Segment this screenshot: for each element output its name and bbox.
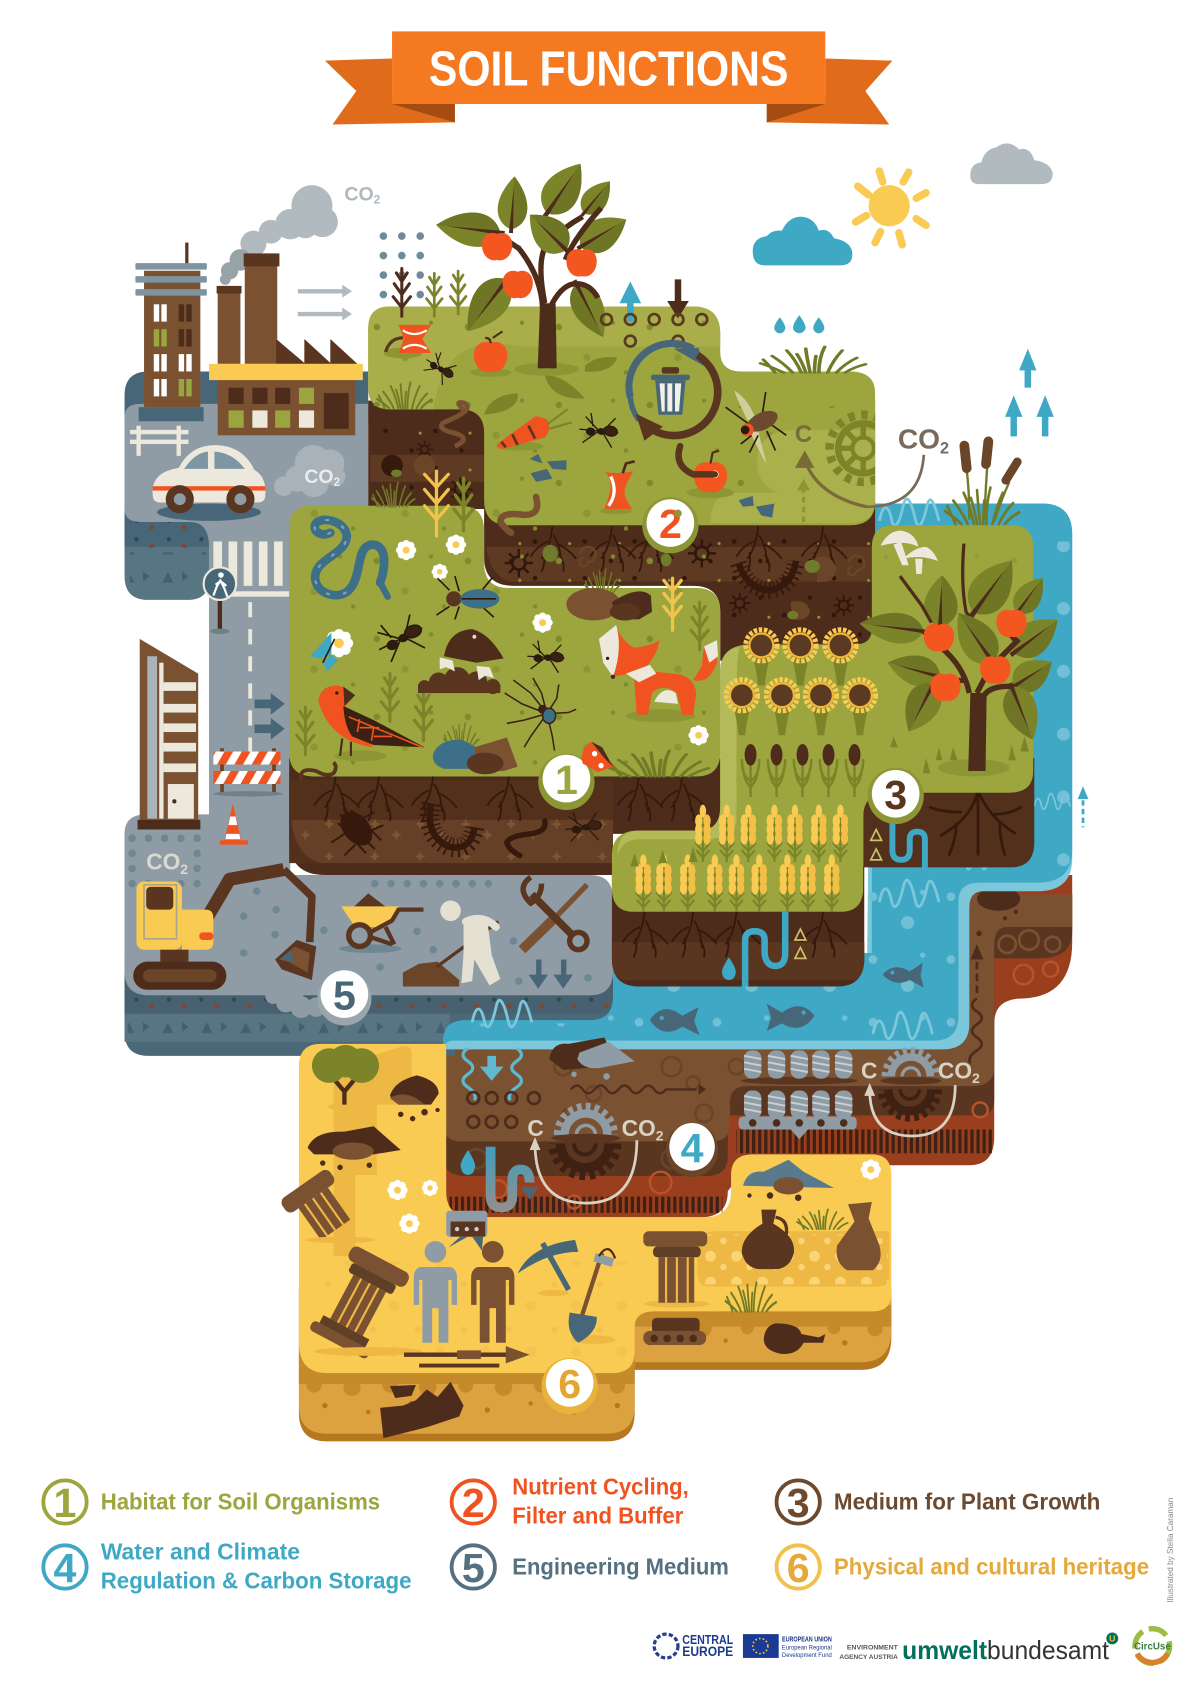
ant bbox=[577, 411, 621, 449]
brown up arrow and wavy line bbox=[970, 944, 983, 1063]
panel 5: engineering medium grey ground bbox=[125, 371, 613, 1056]
grass tuft bbox=[607, 751, 709, 776]
buried amphora bbox=[764, 1323, 825, 1354]
red butterfly bbox=[582, 742, 613, 772]
legend item 3 bbox=[777, 1480, 1100, 1526]
C to CO2 cycle left: 2 bbox=[656, 1127, 664, 1143]
apple core bbox=[600, 461, 635, 514]
grass left bbox=[377, 382, 432, 408]
legend item 1 bbox=[43, 1480, 380, 1526]
illustrator credit: Illustrated by Stella Caraman bbox=[1166, 1498, 1175, 1603]
legend item 4: 4 bbox=[54, 1545, 77, 1591]
dust cloud bbox=[265, 988, 336, 1018]
panel 4: carbon storage ground with red subsoil bbox=[443, 875, 1072, 1217]
stones bbox=[433, 723, 518, 774]
ground dots bbox=[128, 834, 592, 985]
legend item 2: 2 bbox=[462, 1480, 485, 1526]
cattails bbox=[959, 436, 1023, 522]
tree roots bbox=[929, 791, 1021, 855]
CO2 label on ground: 2 bbox=[180, 861, 188, 877]
mole bbox=[418, 629, 504, 694]
gas exchange arrows and pores bbox=[601, 279, 707, 347]
broken vase bbox=[837, 1202, 881, 1270]
lighter left ledge bbox=[617, 646, 740, 855]
wavy migration arrow bbox=[571, 1084, 706, 1095]
evaporation arrows bbox=[1005, 349, 1054, 436]
tower block bbox=[135, 243, 207, 421]
fruit tree top bbox=[434, 154, 635, 376]
rain drops bbox=[774, 315, 824, 333]
legend bbox=[43, 1473, 1149, 1594]
excavator bbox=[133, 870, 316, 990]
CircUse logo: CircUse bbox=[1134, 1641, 1171, 1652]
legend item 1: Habitat for Soil Organisms bbox=[101, 1489, 380, 1515]
light patches near gear bbox=[710, 430, 875, 523]
legend item 5: 5 bbox=[462, 1545, 485, 1591]
soil creatures bbox=[314, 775, 706, 855]
leaning broken column bbox=[279, 1167, 359, 1247]
green sprigs bbox=[297, 602, 708, 755]
badge 3 bbox=[868, 768, 924, 824]
EU fund text: Development Fund bbox=[782, 1653, 832, 1659]
CO2 label: CO bbox=[344, 183, 374, 205]
waves bbox=[472, 499, 1070, 1039]
particle dots bbox=[380, 232, 424, 298]
infiltration waves bbox=[463, 1048, 521, 1100]
daisies bbox=[396, 535, 709, 745]
soil pebbles bbox=[381, 455, 836, 620]
CO2 emission arc with cattails bbox=[866, 423, 1023, 524]
recycling bin cycle bbox=[629, 343, 718, 441]
panel 3 soil layers bbox=[612, 758, 1034, 987]
blue drainage pipes and triangles bbox=[722, 818, 925, 987]
badge 6: 6 bbox=[558, 1361, 581, 1407]
C to CO2 cycle left: CO bbox=[622, 1115, 656, 1141]
badge 2 bbox=[642, 497, 699, 553]
legend item 6: 6 bbox=[787, 1545, 810, 1591]
soil critters in nutrient layer bbox=[416, 441, 854, 616]
environment agency text: AGENCY AUSTRIA bbox=[839, 1654, 898, 1661]
pore circles bbox=[467, 1092, 540, 1128]
amphora jug bbox=[742, 1210, 794, 1269]
panel 2: nutrient cycling green surface bbox=[368, 154, 897, 553]
legend item 5 bbox=[452, 1545, 729, 1591]
CO2 label: 2 bbox=[374, 193, 381, 207]
panel 2 soil: dark brown under nutrient area bbox=[368, 401, 875, 661]
down arrow bbox=[480, 1056, 504, 1081]
road centre dashes bbox=[248, 602, 252, 758]
fox bbox=[599, 625, 718, 722]
fish bbox=[650, 963, 924, 1035]
smoke bbox=[220, 185, 338, 285]
tilted column bbox=[309, 1244, 411, 1360]
EU fund text: EUROPEAN UNION bbox=[782, 1637, 832, 1644]
shovel bbox=[569, 1249, 615, 1344]
apartment building bbox=[138, 639, 200, 830]
U mark: U bbox=[1109, 1634, 1115, 1644]
C to CO2 cycle left bbox=[527, 1106, 664, 1203]
CircUse logo bbox=[1134, 1629, 1171, 1663]
CO2 label on ground: CO bbox=[146, 849, 180, 875]
yellow wheat on ledge bbox=[425, 471, 448, 536]
small plants above ground bbox=[393, 269, 466, 316]
worm at edge bbox=[301, 762, 336, 780]
sky: clouds and sun bbox=[753, 143, 1054, 436]
badge 4: 4 bbox=[681, 1125, 704, 1171]
CO2 emission arc with cattails: 2 bbox=[940, 440, 949, 458]
car exhaust CO2 cloud: CO bbox=[304, 466, 334, 488]
badge 1: 1 bbox=[555, 757, 578, 803]
maize row bbox=[742, 744, 863, 797]
car bbox=[153, 445, 265, 521]
road barrier bbox=[213, 748, 283, 796]
legend item 4: Water and Climate bbox=[101, 1538, 300, 1564]
grass on ledge bbox=[372, 483, 415, 507]
EU fund text: European Regional bbox=[782, 1645, 832, 1651]
rock on column bbox=[976, 887, 1020, 936]
grass tuft on step bbox=[760, 347, 866, 373]
rocks at top bbox=[549, 1037, 635, 1080]
spider bbox=[505, 678, 576, 750]
crosswalk bbox=[213, 541, 290, 597]
decomposing gear and carbon bbox=[795, 410, 876, 522]
apple with worm bbox=[679, 446, 734, 498]
CO2 emission arc with cattails: CO bbox=[898, 423, 940, 454]
small triangles on field bbox=[630, 736, 1029, 866]
legend item 2: Nutrient Cycling, bbox=[512, 1473, 689, 1499]
traffic cone bbox=[220, 804, 248, 845]
screws lower row with plate bbox=[739, 1090, 857, 1139]
decomposing gear and carbon: C bbox=[795, 421, 812, 448]
badge 3: 3 bbox=[884, 772, 907, 818]
legend item 2 bbox=[452, 1473, 689, 1529]
legend item 2: Filter and Buffer bbox=[512, 1503, 684, 1529]
badge 4 bbox=[666, 1123, 718, 1177]
legend item 1: 1 bbox=[54, 1480, 76, 1526]
EU flag bbox=[743, 1634, 779, 1658]
fallen leaves bbox=[484, 357, 617, 415]
worker with rake and soil mound bbox=[403, 900, 500, 987]
downward arrows bbox=[529, 959, 573, 989]
C to CO2 cycle left: C bbox=[527, 1115, 544, 1141]
two people bbox=[414, 1241, 514, 1343]
green sprig on ledge bbox=[454, 478, 473, 531]
standing column bbox=[643, 1231, 709, 1308]
grass tufts bbox=[726, 1209, 848, 1311]
legend item 4: Regulation & Carbon Storage bbox=[101, 1568, 412, 1594]
factory and tower with smoke bbox=[135, 183, 424, 435]
ant on grass bbox=[420, 348, 460, 387]
ants bbox=[371, 612, 567, 674]
rocks with grass bbox=[566, 569, 652, 621]
mushrooms bbox=[881, 531, 938, 574]
drop and drain pipe left bbox=[461, 1147, 538, 1207]
spiral fossils bbox=[579, 547, 864, 575]
panel 3: plant growth green surface bbox=[612, 525, 1068, 912]
badge 5: 5 bbox=[333, 972, 356, 1018]
legend item 4 bbox=[43, 1538, 412, 1594]
car exhaust CO2 cloud: 2 bbox=[334, 475, 341, 489]
pickaxe bbox=[518, 1240, 578, 1296]
speech bubble bbox=[446, 1211, 487, 1251]
legend item 5: Engineering Medium bbox=[512, 1554, 729, 1580]
fruit tree right bbox=[858, 544, 1068, 776]
apple bbox=[470, 331, 511, 377]
partner logos bbox=[654, 1629, 1171, 1665]
C to CO2 cycle right: CO bbox=[938, 1058, 972, 1084]
rock pile bbox=[308, 1126, 401, 1170]
badge 5 bbox=[317, 970, 371, 1026]
direction arrows bbox=[255, 693, 285, 740]
carbon and water details bbox=[461, 1037, 980, 1207]
screws top row bbox=[741, 1050, 858, 1085]
C to CO2 cycle right: C bbox=[861, 1058, 877, 1084]
U mark bbox=[1106, 1632, 1118, 1644]
spear and stick bbox=[404, 1346, 530, 1366]
badge 2: 2 bbox=[659, 501, 682, 547]
badge 1 bbox=[538, 754, 595, 810]
factory building bbox=[209, 253, 363, 435]
umweltbundesamt wordmark: umweltbundesamt bbox=[902, 1635, 1110, 1665]
yellow wheat sprig bbox=[664, 578, 681, 630]
pedestrian sign bbox=[204, 567, 236, 634]
panel 1: habitat green surface bbox=[289, 471, 720, 810]
grey cloud bbox=[970, 143, 1053, 184]
legend item 6: Physical and cultural heritage bbox=[834, 1554, 1149, 1580]
broken amphora in deep layer bbox=[380, 1382, 464, 1438]
environment agency text bbox=[839, 1644, 898, 1661]
panel 6: physical and cultural heritage yellow ground bbox=[279, 1044, 891, 1441]
environment agency text: ENVIRONMENT bbox=[847, 1644, 898, 1651]
fly bbox=[726, 391, 786, 463]
sunflowers bbox=[726, 630, 876, 735]
park bench bbox=[130, 426, 188, 456]
legend item 3: 3 bbox=[787, 1480, 810, 1526]
snake bbox=[315, 520, 388, 597]
Central Europe logo: CENTRAL bbox=[682, 1633, 734, 1647]
carrot bbox=[496, 409, 572, 450]
stones bbox=[530, 454, 774, 518]
panel 1 soil layer bbox=[289, 758, 723, 875]
grey rocks bbox=[743, 1160, 834, 1201]
eaten apple core bbox=[383, 325, 431, 358]
badge 6 bbox=[542, 1358, 598, 1414]
dashed blue arrow outside river bbox=[1078, 786, 1088, 827]
bird bbox=[318, 685, 425, 761]
butterfly on daisy bbox=[310, 629, 353, 671]
C to CO2 cycle right bbox=[861, 1050, 980, 1136]
Central Europe logo bbox=[654, 1633, 734, 1659]
wheat rows bbox=[636, 805, 848, 912]
Central Europe logo: EUROPE bbox=[682, 1644, 733, 1659]
beetle bbox=[436, 576, 499, 619]
car exhaust CO2 cloud bbox=[274, 445, 345, 497]
wheelbarrow bbox=[339, 893, 423, 953]
rocks bbox=[390, 1075, 440, 1121]
title banner bbox=[325, 31, 892, 125]
blue cloud bbox=[753, 217, 852, 265]
crossed tools bbox=[522, 877, 587, 950]
title text: SOIL FUNCTIONS bbox=[429, 43, 788, 97]
legend item 3: Medium for Plant Growth bbox=[834, 1489, 1100, 1515]
daisies bbox=[387, 1159, 881, 1234]
legend item 6 bbox=[777, 1545, 1149, 1591]
C to CO2 cycle right: 2 bbox=[972, 1070, 980, 1086]
column base buried bbox=[643, 1318, 706, 1345]
water: river and lake bbox=[443, 499, 1088, 1050]
worm bbox=[500, 497, 537, 533]
grey wind arrows bbox=[298, 285, 352, 321]
sun bbox=[856, 171, 926, 245]
worm bbox=[441, 402, 467, 446]
acacia tree bbox=[312, 1045, 379, 1111]
EU fund text bbox=[782, 1637, 832, 1659]
